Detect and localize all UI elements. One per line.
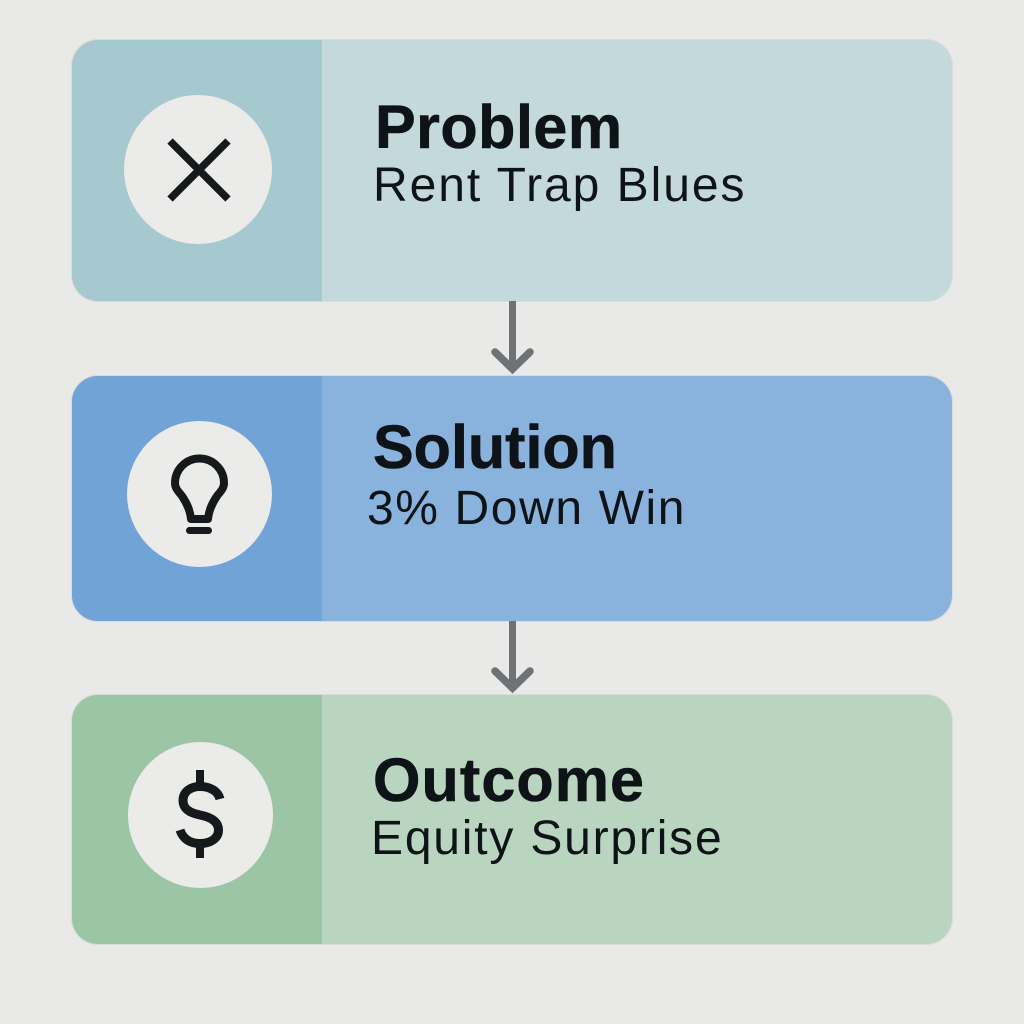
heading: outcome: Outcome	[373, 746, 645, 814]
icon column: solution	[72, 376, 322, 621]
icon: dollar in circle	[128, 742, 273, 888]
text: rent trap blues: Rent Trap Blues	[373, 159, 746, 212]
panel: solution	[72, 376, 952, 621]
icon: X in circle	[124, 95, 272, 244]
icon column: outcome	[72, 695, 322, 944]
arrow: solution to outcome	[491, 621, 534, 694]
heading: problem: Problem	[375, 93, 623, 161]
arrow: problem to solution	[491, 301, 534, 374]
heading: solution: Solution	[373, 413, 617, 481]
text: 3% down win: 3% Down Win	[367, 482, 686, 535]
icon column: problem	[72, 40, 322, 301]
panel: outcome	[72, 695, 952, 944]
panel: problem	[72, 40, 952, 301]
text: equity surprise: Equity Surprise	[371, 812, 723, 865]
icon: light bulb in circle	[127, 421, 272, 567]
